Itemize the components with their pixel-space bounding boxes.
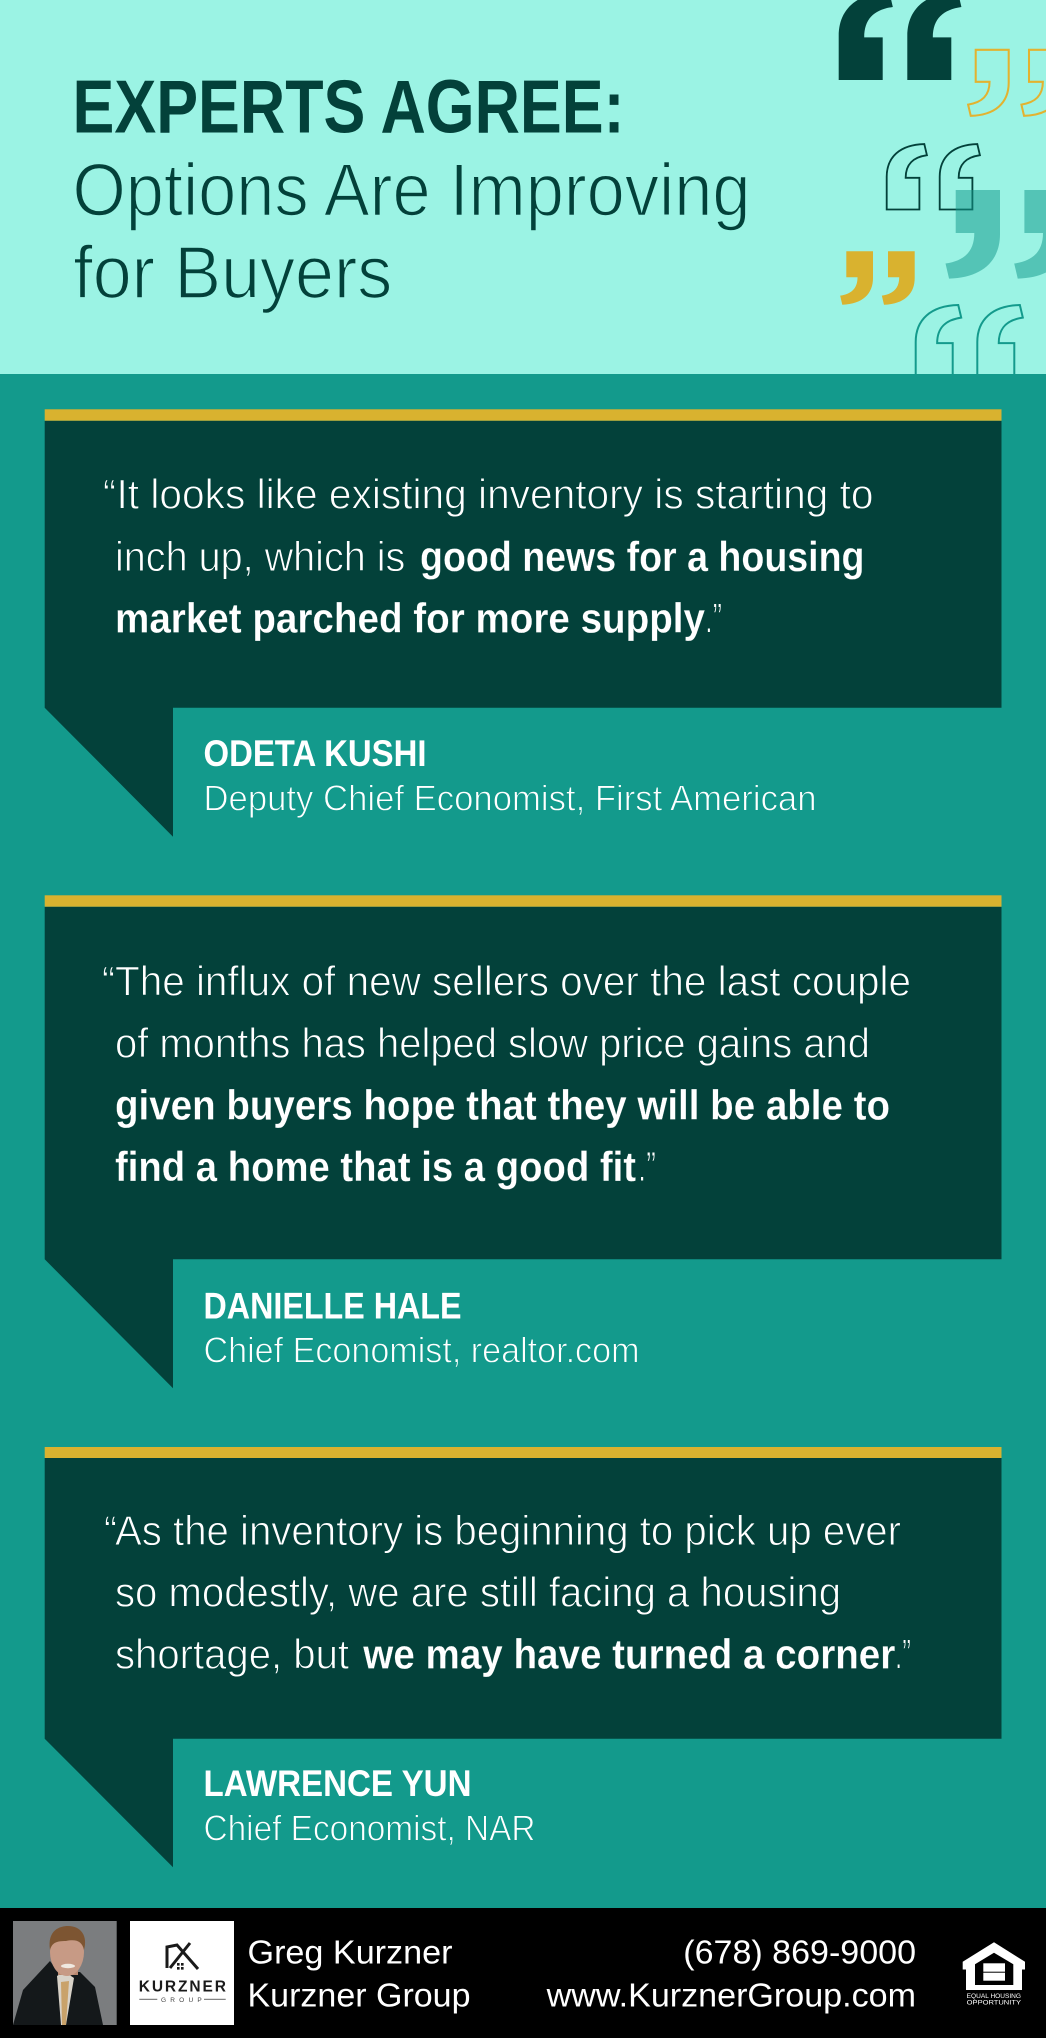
speech box with tail xyxy=(45,421,1001,837)
icon: dark filled opening quote xyxy=(839,0,961,80)
quote text: given buyers hope that they will be able to xyxy=(115,1081,890,1128)
panel: quote 2 Danielle Hale xyxy=(45,895,1001,1388)
quote text: “ xyxy=(103,471,116,518)
contact details xyxy=(546,1934,916,2015)
footer bar xyxy=(0,1908,1046,2038)
Kurzner Group logo xyxy=(130,1921,234,2025)
attribution: Chief Economist, realtor.com xyxy=(204,1329,640,1370)
quote text: we may have turned a corner xyxy=(362,1630,895,1677)
quote text: good news for a housing xyxy=(420,533,864,580)
panel: quote 3 Lawrence Yun xyxy=(45,1447,1001,1867)
quote text: market parched for more supply xyxy=(115,595,706,642)
contact details: www.KurznerGroup.com xyxy=(546,1978,916,2015)
icon: equal housing opportunity: OPPORTUNITY xyxy=(967,1999,1022,2006)
gold bar xyxy=(45,1447,1001,1458)
quote text: .” xyxy=(895,1630,911,1677)
icon: translucent teal closing quote xyxy=(946,190,1046,279)
attribution: Deputy Chief Economist, First American xyxy=(204,778,816,819)
quote text xyxy=(104,1507,911,1677)
logo wordmark: KURZNER xyxy=(139,1979,226,1996)
agent name and company: Greg Kurzner xyxy=(248,1934,452,1971)
gold bar xyxy=(45,895,1001,907)
quote text: The influx of new sellers over the last couple xyxy=(115,957,911,1004)
logo subline: GROUP xyxy=(161,1997,202,2004)
attribution xyxy=(204,1763,536,1849)
quote text: inch up, which is xyxy=(115,533,405,580)
attribution: ODETA KUSHI xyxy=(204,733,426,774)
icon: equal housing opportunity xyxy=(963,1942,1025,2006)
panel: quote 1 Odeta Kushi xyxy=(45,409,1001,837)
title: Options Are Improving xyxy=(72,148,750,232)
quote text: “ xyxy=(104,1507,117,1554)
quote text: “ xyxy=(102,957,115,1004)
attribution xyxy=(204,733,816,819)
gold bar xyxy=(45,409,1001,421)
icon: gold outline closing quote xyxy=(968,50,1046,116)
teal main panel xyxy=(0,374,1046,1908)
title xyxy=(72,65,750,314)
quote text: so modestly, we are still facing a housing xyxy=(115,1569,841,1616)
title: for Buyers xyxy=(73,231,392,314)
icon: equal housing opportunity: EQUAL HOUSING xyxy=(967,1993,1021,2000)
decorative quote marks xyxy=(839,0,1046,379)
agent name and company: Kurzner Group xyxy=(248,1978,470,2015)
title: EXPERTS AGREE: xyxy=(72,65,624,149)
quote text xyxy=(102,957,911,1190)
icon: dark outline opening quote xyxy=(887,144,980,210)
contact details: (678) 869-9000 xyxy=(683,1934,916,1971)
quote text: find a home that is a good fit xyxy=(115,1143,636,1190)
quote text xyxy=(103,471,874,642)
speech box with tail xyxy=(45,1458,1001,1867)
agent photo xyxy=(13,1921,117,2025)
quote text: As the inventory is beginning to pick up ever xyxy=(115,1507,901,1554)
quote text: shortage, but xyxy=(115,1630,349,1677)
attribution xyxy=(204,1285,640,1370)
icon: teal outline opening quote xyxy=(916,305,1023,379)
quote text: It looks like existing inventory is starting to xyxy=(116,471,874,518)
header background xyxy=(0,0,1046,374)
quote text: .” xyxy=(705,595,722,642)
speech box with tail xyxy=(45,907,1001,1388)
quote text: of months has helped slow price gains and xyxy=(115,1019,870,1066)
attribution: DANIELLE HALE xyxy=(204,1285,462,1326)
icon: gold filled closing quote xyxy=(840,251,915,305)
attribution: Chief Economist, NAR xyxy=(204,1808,536,1849)
attribution: LAWRENCE YUN xyxy=(204,1763,472,1804)
quote text: .” xyxy=(638,1143,656,1190)
logo mark xyxy=(167,1943,198,1970)
agent name and company xyxy=(248,1934,470,2015)
